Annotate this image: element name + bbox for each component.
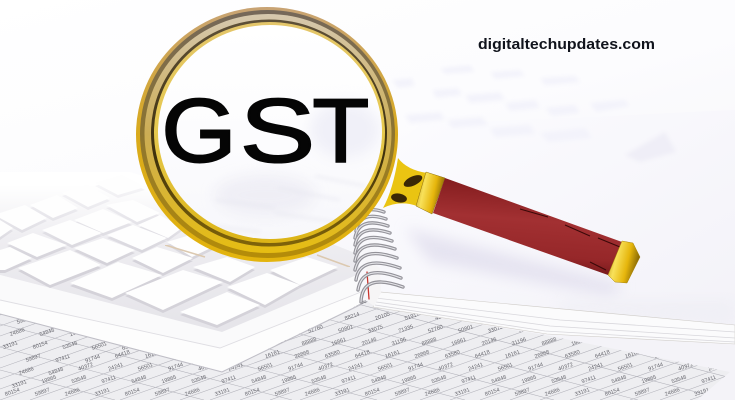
spreadsheet under the objects: 33191 54848 91744 63580 20146 71335 49828 bbox=[454, 311, 691, 398]
spreadsheet under the objects: 33191 54848 91744 63580 20146 71335 49828 18006 bbox=[334, 299, 608, 398]
spreadsheet under the objects: 80154 19865 40372 64418 31196 52760 88214 27693 bbox=[4, 299, 277, 398]
spreadsheet under the objects: 59897 53548 24241 16161 88888 50801 20105 58601 bbox=[274, 299, 548, 398]
spreadsheet under the objects: 33191 54848 91744 63580 20146 71335 49828 18006 bbox=[214, 299, 488, 398]
blurred desk seen through the lens bbox=[210, 102, 380, 232]
spreadsheet under the objects: 80154 19865 40372 64418 31196 52760 88214 27693 bbox=[124, 299, 397, 398]
spreadsheet under the objects: 24686 97411 56501 26868 16861 33075 51917 40664 bbox=[424, 299, 697, 398]
spreadsheet under the objects: 59897 53548 24241 16161 88888 50801 bbox=[514, 324, 714, 398]
calculator bbox=[0, 172, 362, 372]
spreadsheet under the objects: 33191 54848 91744 63580 20146 71335 49828 bbox=[11, 303, 248, 390]
handle neck bbox=[383, 158, 427, 208]
spreadsheet under the objects: 33191 54848 91744 63580 20146 71335 49828 18006 bbox=[94, 299, 368, 398]
notebook page edges bbox=[366, 260, 735, 344]
website label: digitaltechupdates.com bbox=[478, 37, 655, 53]
gold end cap bbox=[608, 241, 640, 283]
blurred keyboard in the background bbox=[392, 65, 630, 142]
spreadsheet under the objects: 59897 53548 bbox=[16, 303, 69, 326]
spreadsheet under the objects: 24686 97411 56501 26868 16861 33075 51917 40664 bbox=[304, 299, 577, 398]
spreadsheet under the objects: 24686 97411 56501 bbox=[9, 302, 99, 338]
spreadsheet under the objects: 24686 97411 56501 26868 16861 bbox=[544, 337, 707, 398]
spreadsheet under the objects: 80154 19865 40372 64418 bbox=[32, 302, 159, 351]
spreadsheet under the objects: 24686 97411 56501 26868 16861 33075 51917 40664 bbox=[184, 299, 457, 398]
spreadsheet under the objects: 59897 53548 24241 bbox=[634, 362, 724, 398]
red wooden grip bbox=[433, 178, 622, 275]
spreadsheet under the objects: 33191 54848 91744 63580 bbox=[2, 302, 129, 351]
spreadsheet under the objects: 80154 19865 40372 64418 31196 52760 88214 27693 bbox=[244, 299, 517, 398]
spreadsheet under the objects: 24686 97411 bbox=[664, 375, 717, 398]
spreadsheet under the objects: 59897 53548 24241 16161 88888 50801 20105 58601 bbox=[154, 299, 428, 398]
spreadsheet under the objects: 80154 19865 40372 bbox=[604, 362, 694, 398]
lens text: GST bbox=[162, 80, 369, 181]
calculator keys bbox=[0, 175, 338, 325]
handle collar bbox=[416, 172, 445, 214]
spreadsheet under the objects: 24686 97411 56501 26868 16861 33075 51917 40664 bbox=[64, 299, 337, 398]
spreadsheet under the objects: 59897 53548 24241 16161 88888 50801 20105 58601 bbox=[394, 299, 668, 398]
magnifier ring and lens bbox=[136, 7, 398, 262]
calculator key shadows bbox=[0, 178, 338, 328]
lens text: GST: G bbox=[162, 80, 236, 181]
blurred dark pad in the background bbox=[625, 132, 676, 162]
spreadsheet under the objects: 80154 19865 40372 64418 31196 52760 88214 bbox=[484, 312, 720, 398]
spreadsheet under the objects bbox=[0, 300, 726, 400]
spreadsheet under the objects: 80154 19865 40372 64418 31196 52760 88214 27693 bbox=[364, 299, 637, 398]
spreadsheet under the objects: 59897 53548 24241 16161 88888 bbox=[25, 303, 188, 364]
notebook bbox=[372, 110, 735, 326]
spreadsheet under the objects: 33191 54848 91744 63580 bbox=[574, 349, 701, 398]
lens bbox=[158, 25, 382, 239]
spreadsheet under the objects: 59897 53548 24241 16161 88888 50801 20105 58601 bbox=[34, 299, 308, 398]
lens text: GST: T bbox=[312, 81, 369, 181]
lens text: GST: S bbox=[240, 80, 315, 181]
magnifier handle bbox=[383, 158, 640, 283]
spreadsheet under the objects: 33191 bbox=[694, 387, 710, 398]
spreadsheet under the objects: 24686 97411 56501 26868 16861 33075 bbox=[18, 303, 218, 377]
notebook spiral rings bbox=[355, 210, 403, 302]
